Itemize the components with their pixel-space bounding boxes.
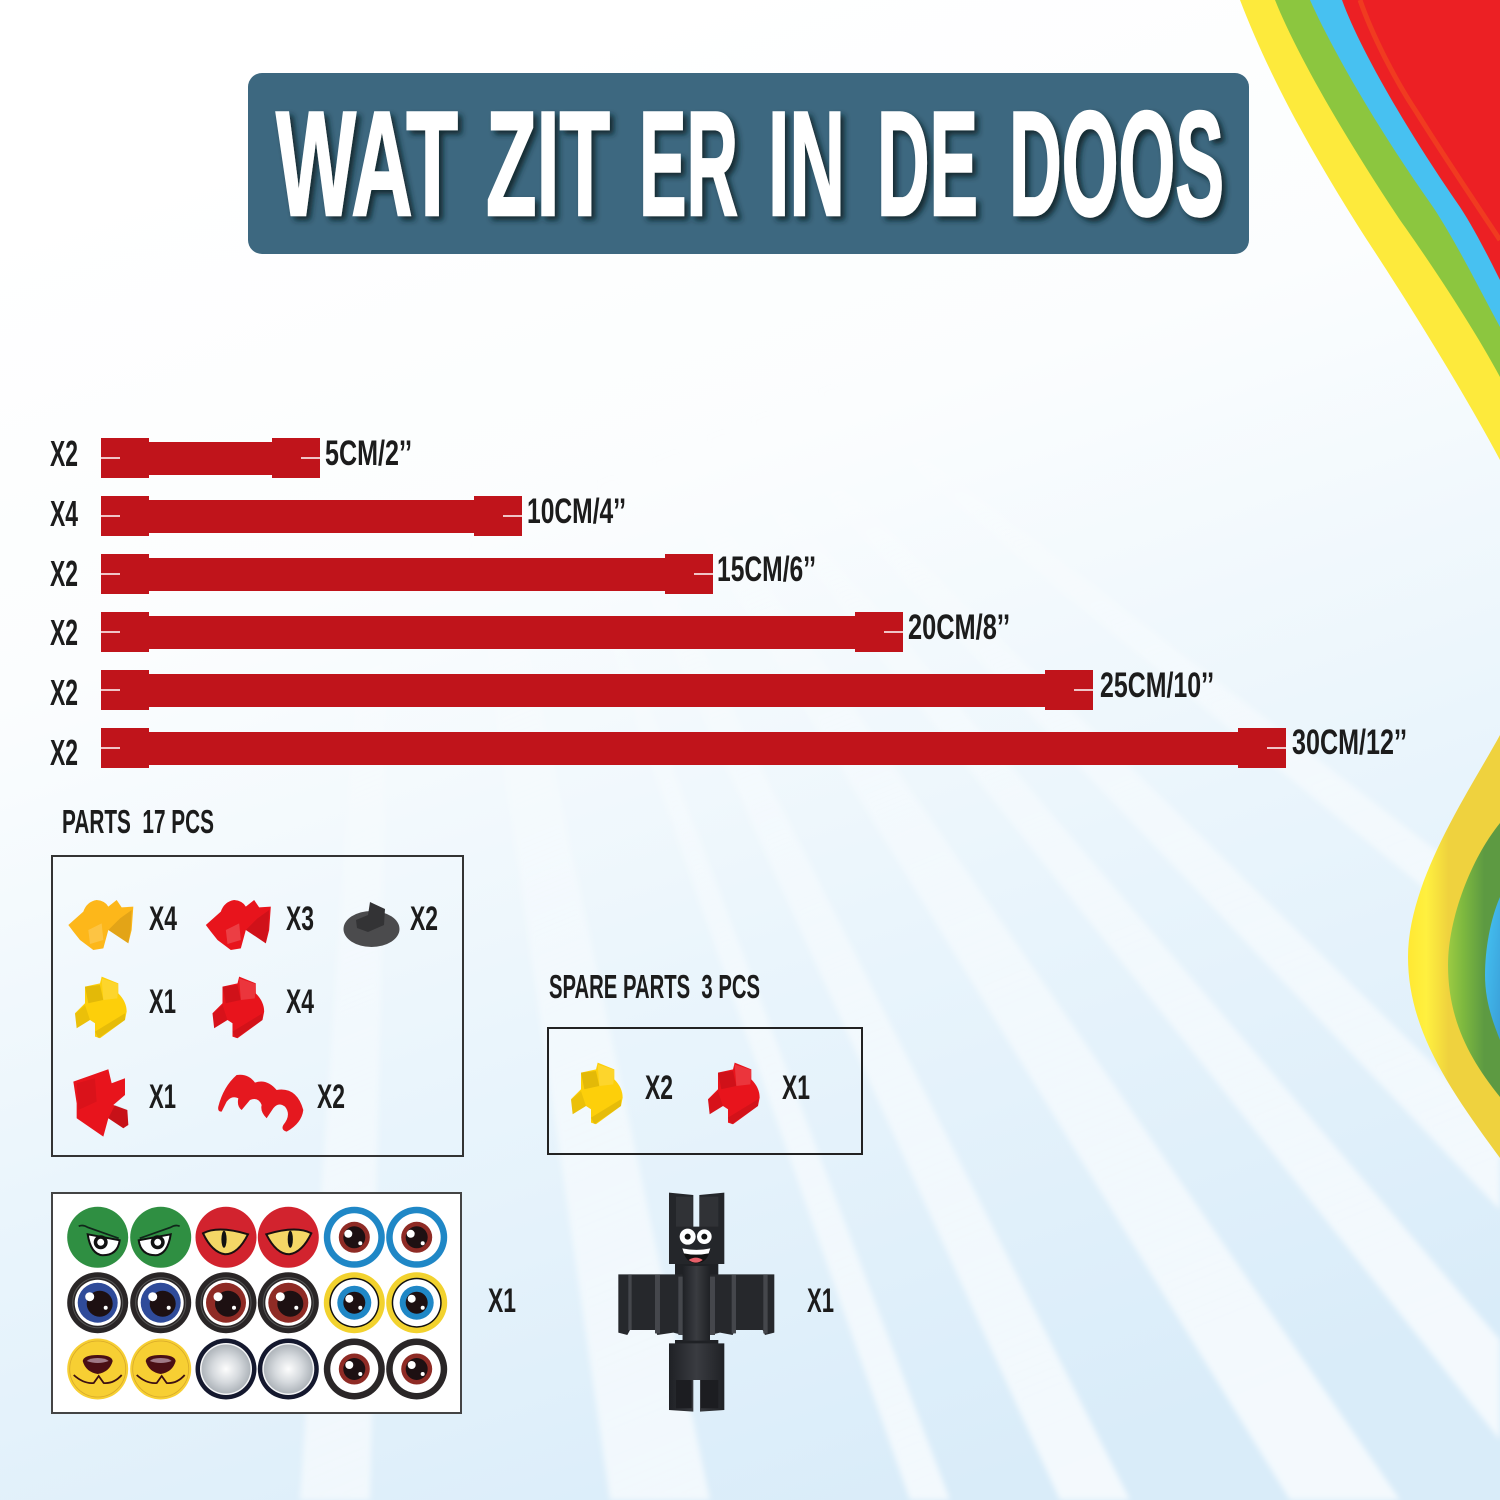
quantity: X1 [149,1078,176,1116]
quantity: X2 [410,900,438,938]
decorative ribbon: lower right [1408,735,1500,1158]
heading: spare parts: SPARE PARTS 3 PCS [549,968,760,1005]
heading: parts: PARTS 17 PCS [62,803,214,840]
quantity: X2 [317,1078,345,1116]
track 25cm: 25CM/10’’ [1100,666,1214,705]
title [276,80,1224,247]
track 30cm: 30CM/12’’ [1292,723,1407,762]
title: DE [877,80,978,247]
icon: yellow single connector [75,977,127,1038]
track 20cm [50,608,1010,653]
icon: yellow double connector [68,900,133,950]
panel: parts [52,856,463,1156]
icon: red triple clip [218,1075,303,1132]
track 15cm: X2 [50,553,78,594]
icon: red single connector [212,977,264,1038]
decorative ribbon: top right [1240,0,1500,460]
track lengths chart [50,433,1407,773]
track 30cm [50,723,1407,773]
track 25cm [50,666,1214,713]
track 5cm: X2 [50,433,78,474]
quantity: character: X1 [807,1282,834,1320]
quantity: stickers: X1 [488,1282,516,1320]
track 30cm: X2 [50,732,78,773]
title: WAT [276,80,458,247]
quantity: X4 [286,983,314,1021]
sticker row 1 [67,1207,447,1268]
title banner [248,73,1249,254]
quantity: X2 [645,1069,673,1107]
quantity: X3 [286,900,314,938]
track 20cm: 20CM/8’’ [908,608,1010,647]
quantity: X1 [782,1069,810,1107]
track 15cm: 15CM/6’’ [717,550,816,589]
track 25cm: X2 [50,672,78,713]
title banner: DOOS [1009,80,1224,247]
icon: red connector [708,1063,760,1124]
icon: red angled connector [73,1069,128,1137]
track 10cm: X4 [50,493,78,534]
track 10cm: 10CM/4’’ [527,492,626,531]
icon: bat character connector [618,1193,774,1412]
panel: spare parts [548,1028,862,1154]
track 10cm [50,492,626,536]
track 5cm: 5CM/2’’ [325,434,412,473]
title: ER [639,80,738,247]
panel: eye stickers [52,1193,461,1413]
icon: yellow connector [571,1063,623,1124]
sticker row 2 [67,1272,447,1333]
track 15cm [50,550,816,594]
title: ZIT [486,80,610,247]
icon: grey base [344,902,400,947]
title: IN [768,80,845,247]
track 5cm [50,433,412,478]
track 20cm: X2 [50,612,78,653]
quantity: X1 [149,983,176,1021]
quantity: X4 [149,900,177,938]
icon: red double connector [206,900,271,950]
sticker row 3 [67,1338,447,1400]
